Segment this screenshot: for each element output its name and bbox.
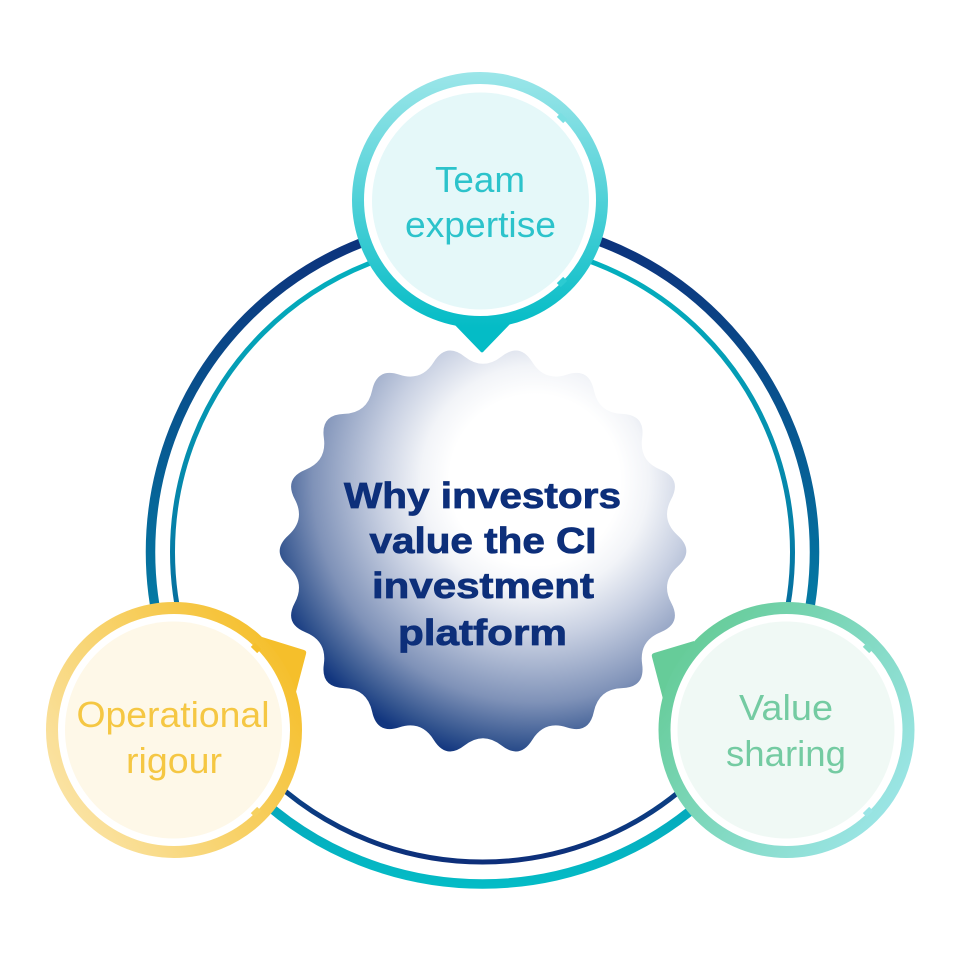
circle: value sharing xyxy=(664,608,908,852)
label: team expertise: expertise xyxy=(405,204,556,245)
node: Value sharing xyxy=(652,608,908,852)
node: Team expertise xyxy=(358,78,602,352)
central title: value the CI xyxy=(370,520,596,561)
label: operational rigour xyxy=(76,694,270,781)
label: team expertise: Team xyxy=(435,159,525,200)
label: team expertise xyxy=(405,159,556,245)
pointer: value sharing xyxy=(652,641,694,699)
central badge xyxy=(280,351,686,751)
circle: operational rigour xyxy=(52,608,296,852)
outer ring xyxy=(150,220,814,884)
node: Operational rigour xyxy=(52,608,306,852)
circle: team expertise xyxy=(358,78,602,322)
inner ring xyxy=(172,242,792,862)
central title: platform xyxy=(398,612,567,653)
label: value sharing xyxy=(726,687,846,774)
pointer: team expertise xyxy=(452,322,512,352)
central title: investment xyxy=(372,565,594,606)
pointer: operational rigour xyxy=(262,637,306,692)
label: operational rigour: Operational xyxy=(76,694,270,735)
central title: Why investors xyxy=(344,475,621,516)
label: value sharing: Value xyxy=(739,687,833,728)
label: value sharing: sharing xyxy=(726,733,846,774)
central title xyxy=(344,475,621,653)
label: operational rigour: rigour xyxy=(126,740,222,781)
